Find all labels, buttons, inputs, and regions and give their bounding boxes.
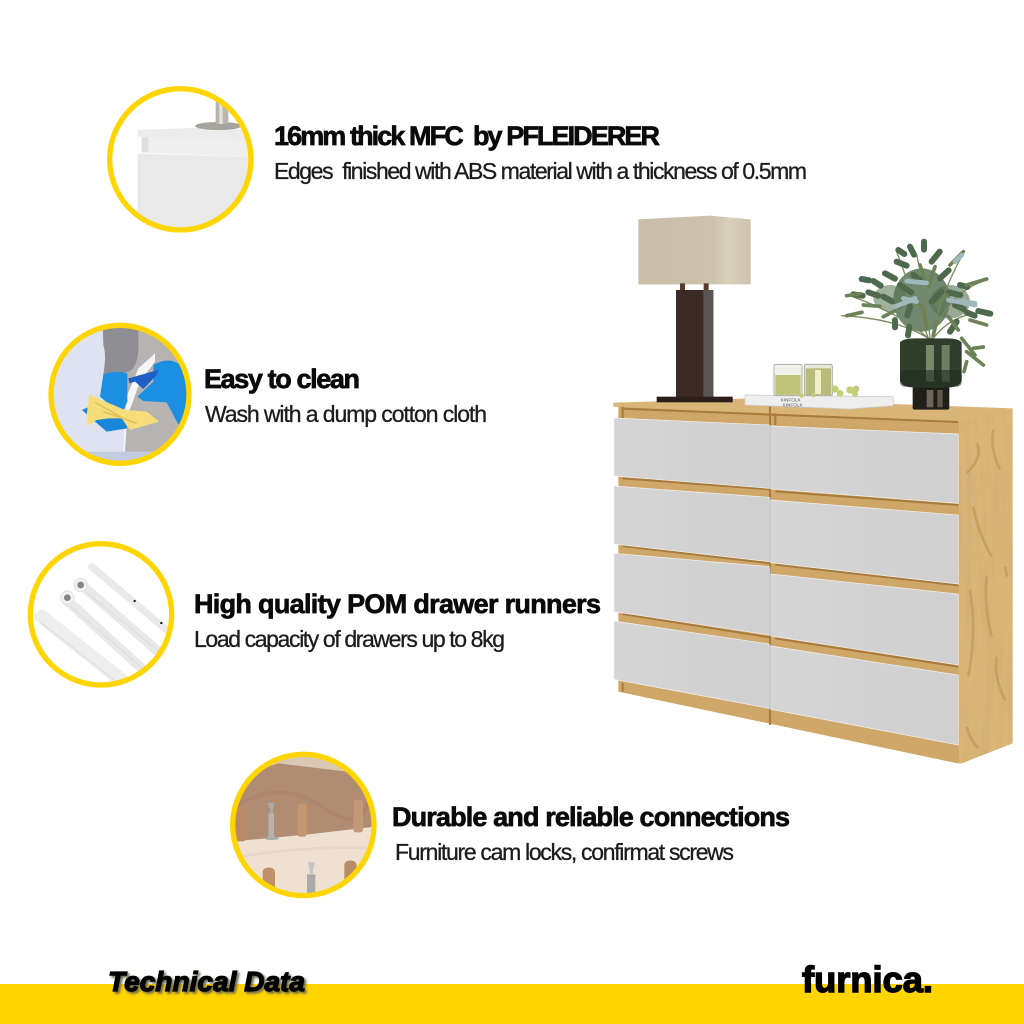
glasses and magazines bbox=[745, 364, 893, 409]
heading: POM drawer runners: High quality POM drawer runners bbox=[194, 589, 601, 619]
footer yellow bar bbox=[0, 984, 1024, 1024]
heading: durable connections: Durable and reliable connections bbox=[392, 802, 790, 832]
brand logo: furnica.: furnica. bbox=[802, 959, 933, 1000]
footer label: Technical Data: Technical Data bbox=[108, 966, 305, 997]
icon: wooden dowels and cam screws in yellow ring bbox=[232, 752, 375, 898]
table lamp bbox=[638, 216, 751, 402]
feature 4: connections bbox=[232, 752, 790, 898]
feature 1: MFC thickness bbox=[110, 89, 807, 237]
text: washing instructions: Wash with a dump cotton cloth bbox=[205, 401, 487, 427]
feature 2: easy to clean bbox=[50, 325, 487, 465]
dresser front carcass bbox=[618, 407, 959, 763]
glasses and magazines: KINFOLK bbox=[781, 397, 801, 402]
center gap between drawer columns bbox=[768, 426, 771, 709]
dresser side panel bbox=[959, 408, 1013, 763]
text: load capacity: Load capacity of drawers up to 8kg bbox=[194, 626, 505, 652]
dresser top board bbox=[613, 399, 1013, 422]
heading: 16mm thick MFC: 16mm thick MFC by PFLEIDERER bbox=[274, 121, 660, 151]
footer label: Technical Data: Technical Data bbox=[110, 968, 307, 999]
drawer fronts bbox=[614, 418, 958, 745]
icon: white drawer corner in yellow ring bbox=[110, 89, 251, 237]
plant bbox=[842, 242, 990, 372]
icon: white drawer rails in yellow ring bbox=[30, 544, 172, 685]
glasses and magazines: KINFOLK bbox=[783, 402, 803, 407]
dark green glass vase bbox=[900, 338, 962, 410]
decor on top of the dresser bbox=[638, 216, 990, 410]
text: connection types: Furniture cam locks, confirmat screws bbox=[395, 839, 734, 865]
drawer gap shadows bbox=[623, 407, 958, 725]
icon: gloved hands cleaning in yellow ring bbox=[50, 325, 190, 465]
chest of drawers product illustration bbox=[613, 399, 1013, 763]
heading: easy to clean: Easy to clean bbox=[204, 364, 360, 394]
feature 3: drawer runners bbox=[30, 544, 601, 685]
text: edges description: Edges finished with ABS material with a thickness of 0.5mm bbox=[274, 158, 807, 184]
